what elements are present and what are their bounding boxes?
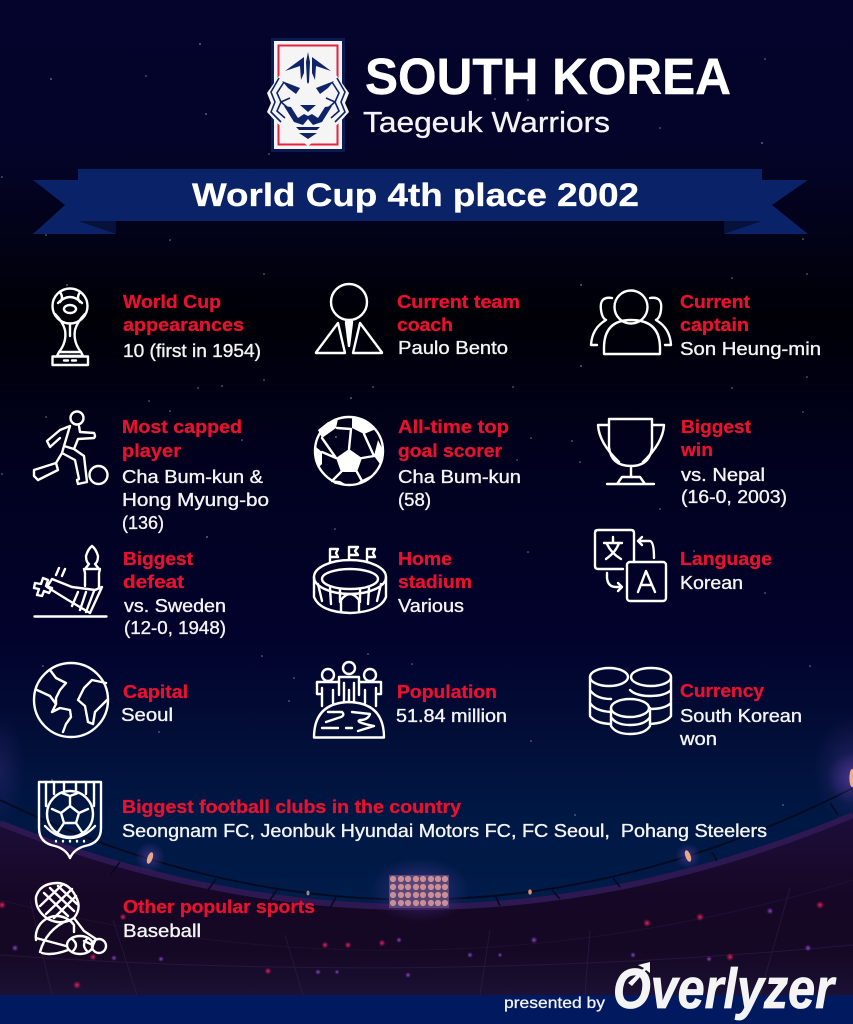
panel: Biggest win bbox=[598, 417, 787, 507]
text: World Cup appearances: appearances bbox=[123, 315, 244, 335]
text: Current team coach: coach bbox=[397, 315, 453, 335]
text: Currency bbox=[679, 681, 802, 749]
icon: fallen chess king bbox=[34, 546, 106, 616]
text: Currency: won bbox=[679, 729, 717, 749]
panel: Capital bbox=[34, 663, 188, 737]
text: Most capped player: Most capped bbox=[122, 417, 242, 437]
text: Current captain: Son Heung-min bbox=[680, 339, 821, 359]
icon: soccer ball bbox=[315, 417, 383, 485]
text: Other popular sports: Baseball bbox=[123, 921, 201, 941]
icon: coin stacks bbox=[590, 668, 671, 734]
text: Biggest defeat: Biggest bbox=[123, 549, 193, 569]
text: Biggest defeat: (12-0, 1948) bbox=[124, 618, 226, 638]
logo: Korea Football Association crest bbox=[267, 38, 349, 152]
subtitle: Taegeuk Warriors bbox=[363, 107, 610, 139]
text: Other popular sports: Other popular sports bbox=[123, 897, 315, 917]
banner heading: World Cup 4th place 2002 bbox=[192, 177, 639, 213]
text: Population: Population bbox=[397, 682, 497, 702]
text: Biggest win: Biggest bbox=[681, 417, 751, 437]
text: Language bbox=[680, 549, 772, 593]
panel: Current team coach bbox=[316, 284, 520, 358]
panel: Most capped player bbox=[34, 412, 269, 533]
text: Most capped player: player bbox=[122, 441, 181, 461]
text: Population bbox=[396, 682, 507, 726]
text: Language: Language bbox=[680, 549, 772, 569]
text: Home stadium bbox=[398, 549, 472, 616]
stadium floodlights bbox=[135, 752, 853, 922]
panel: Current captain bbox=[591, 290, 821, 359]
icon: trophy cup bbox=[598, 419, 664, 484]
panel: Home stadium bbox=[314, 547, 472, 616]
text: Capital bbox=[121, 682, 188, 725]
panel: Currency bbox=[590, 668, 802, 749]
icon: stadium bbox=[314, 547, 386, 613]
text: Currency: Currency bbox=[680, 681, 764, 701]
text: World Cup appearances: 10 (first in 1954) bbox=[123, 341, 261, 361]
text: Current captain: Current bbox=[680, 292, 750, 312]
icon: player kicking ball bbox=[34, 412, 108, 484]
icon: globe bbox=[34, 663, 108, 737]
text: World Cup appearances: World Cup bbox=[123, 292, 221, 312]
text: Language: Korean bbox=[680, 573, 743, 593]
text: Biggest defeat: vs. Sweden bbox=[124, 596, 226, 616]
icon: translate bbox=[595, 530, 666, 601]
text: All-time top goal scorer: (58) bbox=[398, 490, 431, 510]
text: Biggest win: win bbox=[680, 440, 713, 460]
footer bar bbox=[0, 995, 853, 1024]
panel: World Cup appearances bbox=[52, 288, 261, 365]
icon: coach bbox=[316, 284, 382, 353]
text: Capital: Seoul bbox=[121, 705, 173, 725]
stars bbox=[1, 43, 811, 852]
text: Home stadium: Various bbox=[398, 596, 464, 616]
text: Biggest win: (16-0, 2003) bbox=[681, 487, 787, 507]
text: Biggest football clubs: Seongnam FC, Jeonbuk Hyundai Motors FC, FC Seoul, Pohang Steelers bbox=[122, 821, 767, 841]
text: Most capped player bbox=[122, 417, 269, 533]
text: Currency: South Korean bbox=[680, 706, 802, 726]
panel: All-time top goal scorer bbox=[315, 417, 521, 510]
presented by label: presented by bbox=[504, 995, 605, 1012]
text: Most capped player: Hong Myung-bo bbox=[122, 490, 269, 510]
text: Biggest defeat bbox=[123, 549, 226, 638]
icon: people on globe bbox=[314, 662, 384, 738]
text: All-time top goal scorer: Cha Bum-kun bbox=[398, 467, 521, 487]
title: SOUTH KOREA bbox=[365, 48, 731, 105]
icon: captain group bbox=[591, 290, 671, 354]
icon: world cup trophy bbox=[52, 288, 88, 365]
stadium bbox=[0, 788, 853, 995]
text: World Cup appearances bbox=[123, 292, 261, 361]
text: Biggest football clubs: Biggest football clubs in the country bbox=[122, 797, 461, 817]
text: Current captain bbox=[680, 292, 821, 359]
text: All-time top goal scorer bbox=[398, 417, 521, 510]
text: Other popular sports bbox=[123, 897, 315, 941]
text: Current team coach: Paulo Bento bbox=[398, 338, 508, 358]
text: Home stadium: stadium bbox=[398, 572, 472, 592]
text: Capital: Capital bbox=[123, 682, 188, 702]
text: Current team coach: Current team bbox=[397, 292, 520, 312]
text: Current team coach bbox=[397, 292, 520, 358]
icon: sports equipment bbox=[36, 883, 106, 954]
panel: Biggest defeat bbox=[34, 546, 226, 638]
icon: club shield bbox=[39, 782, 101, 858]
panel: Language bbox=[595, 530, 772, 601]
panel: Biggest football clubs bbox=[39, 782, 767, 858]
text: Biggest win bbox=[680, 417, 787, 507]
text: Biggest football clubs bbox=[122, 797, 767, 841]
ribbon banner bbox=[33, 169, 808, 234]
text: Current captain: captain bbox=[680, 315, 749, 335]
text: Most capped player: (136) bbox=[122, 513, 164, 533]
text: Biggest defeat: defeat bbox=[123, 572, 184, 592]
text: Population: 51.84 million bbox=[396, 706, 507, 726]
text: Biggest win: vs. Nepal bbox=[681, 465, 765, 485]
text: All-time top goal scorer: goal scorer bbox=[398, 441, 502, 461]
text: Most capped player: Cha Bum-kun & bbox=[122, 467, 263, 487]
panel: Population bbox=[314, 662, 507, 738]
panel: Other popular sports bbox=[36, 883, 315, 954]
text: All-time top goal scorer: All-time top bbox=[398, 417, 509, 437]
text: Home stadium: Home bbox=[398, 549, 452, 569]
